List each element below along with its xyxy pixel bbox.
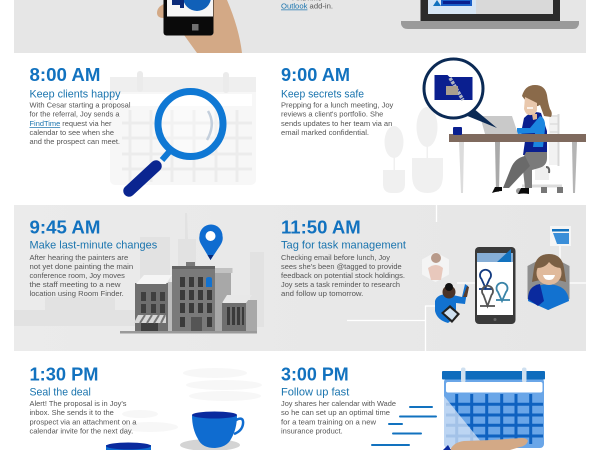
illustration: ghost plants bbox=[383, 107, 443, 193]
icon: hand holding phone bbox=[157, 0, 242, 53]
text: 11:50 AM heading: 11:50 AM bbox=[281, 216, 361, 237]
panel: 3:00 PM bbox=[281, 364, 545, 450]
illustration: woman at desk with laptop bbox=[449, 85, 586, 194]
text: 9:00 AM body: email marked confidential. bbox=[281, 128, 369, 137]
icon: callout with locked folder bbox=[424, 59, 497, 128]
illustration: ghost skyline bbox=[14, 213, 264, 332]
text: 9:45 AM body: the staff meeting to a new bbox=[30, 280, 121, 289]
text: 3:00 PM body bbox=[281, 399, 396, 435]
panel: 1:30 PM bbox=[30, 364, 262, 450]
avatar: smiling woman hexagon bbox=[528, 254, 570, 310]
avatar: woman with phone bbox=[422, 252, 449, 282]
icon: magnifying glass bbox=[129, 92, 223, 191]
icon: phone with pins bbox=[475, 247, 516, 324]
text: 11:50 AM body: Joy sets a task reminder to research bbox=[281, 280, 400, 289]
text: 9:45 AM heading: 9:45 AM bbox=[30, 216, 100, 237]
text: 8:00 AM body: for the referral, Joy sends a bbox=[30, 110, 120, 119]
text: 9:00 AM body: reviews a client's portfolio. She bbox=[281, 110, 383, 119]
text: 11:50 AM body: and follow up tomorrow. bbox=[281, 289, 363, 298]
text: 8:00 AM body: and the prospect can meet. bbox=[30, 137, 120, 146]
text: Keep secrets safe subheading: Keep secrets safe bbox=[281, 88, 364, 100]
text: 9:45 AM body: location using Room Finder. bbox=[30, 289, 124, 298]
text: 8:00 AM body: calendar to see when she bbox=[30, 128, 114, 137]
text: 1:30 PM body bbox=[30, 399, 136, 435]
text: 9:45 AM body: not yet done painting the main bbox=[30, 262, 133, 271]
text: 11:50 AM body: feedback on potential stock holdings. bbox=[281, 271, 405, 280]
text: 8:00 AM heading: 8:00 AM bbox=[30, 64, 100, 85]
icon: blue calendar with hand bbox=[442, 368, 545, 450]
text: 3:00 PM heading: 3:00 PM bbox=[281, 364, 349, 385]
text: 8:00 AM body bbox=[30, 101, 131, 146]
text: Tag for task management subheading: Tag for task management bbox=[281, 240, 406, 252]
text: 9:00 AM body bbox=[281, 101, 394, 137]
laptop bbox=[480, 116, 518, 134]
panel: 9:45 AM bbox=[14, 205, 586, 351]
icon: small calendar tile bbox=[550, 226, 571, 246]
text: 3:00 PM body: Joy shares her calendar with Wade bbox=[281, 399, 396, 408]
text: 11:50 AM body bbox=[281, 253, 405, 298]
desk legs bbox=[459, 142, 577, 193]
text: 1:30 PM body: calendar invite for the next day. bbox=[30, 426, 133, 435]
panel: top band, Outlook add-in bbox=[14, 0, 586, 53]
text: 1:30 PM heading: 1:30 PM bbox=[30, 364, 98, 385]
icon: front coffee cup bbox=[180, 412, 243, 450]
text: 9:00 AM heading: 9:00 AM bbox=[281, 64, 350, 85]
text: 1:30 PM body: prospect via an attachment on a bbox=[30, 417, 136, 426]
text: 9:00 AM body: sends updates to her team via an bbox=[281, 119, 392, 128]
text: 11:50 AM body: sees she's been @tagged to provide bbox=[281, 262, 402, 271]
text: 9:45 AM body: After hearing the painters are bbox=[30, 253, 128, 262]
woman body bbox=[492, 85, 552, 194]
icon: speed lines bbox=[372, 407, 436, 445]
text: 1:30 PM body: inbox. She sends it to the bbox=[30, 408, 114, 417]
pin outlines bbox=[479, 270, 510, 306]
text: 9:45 AM body bbox=[30, 253, 133, 298]
text: 8:00 AM body: With Cesar starting a proposal bbox=[30, 101, 131, 110]
text: 3:00 PM body: for a team training on a new bbox=[281, 417, 377, 426]
illustration: ghost calendar bbox=[110, 71, 256, 185]
panel: 8:00 AM bbox=[30, 64, 256, 191]
illustration: ghost steam bbox=[122, 368, 262, 432]
panel: 11:50 AM bbox=[281, 205, 586, 351]
desk top bbox=[449, 134, 586, 142]
icon: laptop bbox=[401, 0, 579, 29]
illustration: city buildings bbox=[120, 262, 257, 334]
text: 9:00 AM body: Prepping for a lunch meeting, Joy bbox=[281, 101, 394, 110]
icon: location pin bbox=[199, 225, 223, 260]
text: add-in line: Outlook add-in. bbox=[281, 2, 333, 10]
text: Keep clients happy subheading: Keep clients happy bbox=[30, 88, 121, 100]
text: Follow up fast subheading: Follow up fast bbox=[281, 387, 349, 399]
text: 3:00 PM body: insurance product. bbox=[281, 426, 343, 435]
chair bbox=[516, 114, 563, 194]
text: 8:00 AM body: FindTime request via her bbox=[30, 119, 112, 128]
avatar: man with tablet bbox=[435, 283, 469, 323]
text: 3:00 PM body: so he can set up an optimal time bbox=[281, 408, 390, 417]
text: 11:50 AM body: Checking email before lunch, Joy bbox=[281, 253, 390, 262]
text: 1:30 PM body: Alert! The proposal is in Joy's bbox=[30, 399, 127, 408]
panel: 9:00 AM bbox=[281, 59, 586, 194]
icon: back coffee cup bbox=[106, 442, 151, 450]
text: Make last-minute changes subheading: Make last-minute changes bbox=[30, 240, 158, 252]
text: 9:45 AM body: conference room, Joy moves bbox=[30, 271, 125, 280]
text: Seal the deal subheading: Seal the deal bbox=[30, 387, 91, 399]
mug bbox=[453, 127, 462, 135]
